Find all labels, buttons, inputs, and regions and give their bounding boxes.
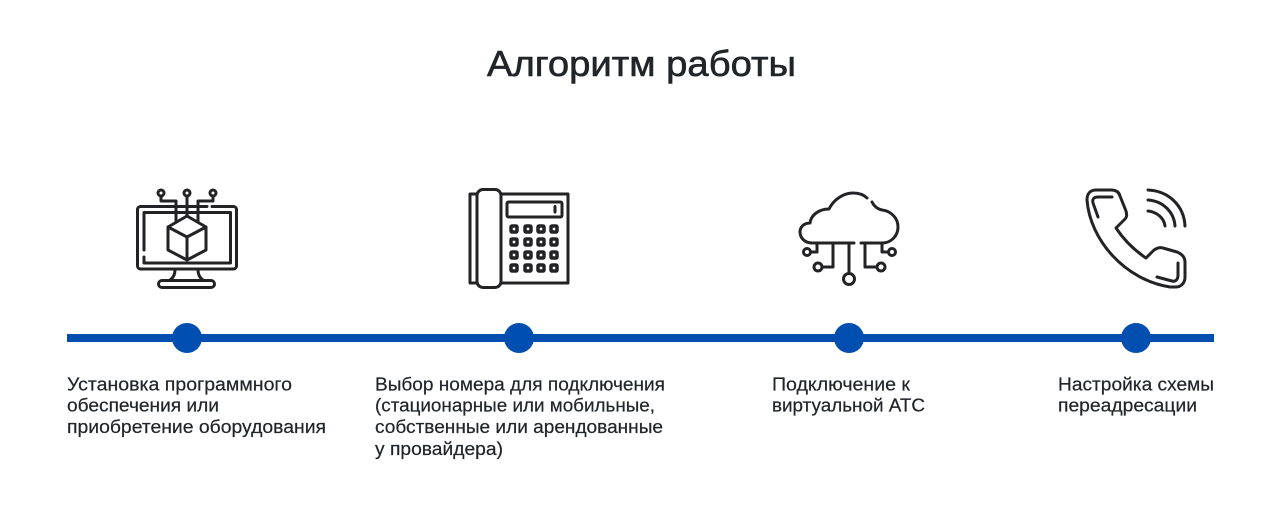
title: Алгоритм работы <box>487 43 796 84</box>
step 2 text: у провайдера) <box>375 438 503 459</box>
step 4 text: переадресации <box>1058 394 1197 416</box>
step 2 text: (стационарные или мобильные, <box>375 394 655 416</box>
timeline marker 4 <box>1121 323 1151 353</box>
step 2 text: собственные или арендованные <box>375 416 663 437</box>
icon: desk telephone <box>470 190 568 288</box>
icon: cloud network <box>800 193 898 284</box>
timeline bar <box>67 334 1214 342</box>
step 3 text <box>772 374 925 416</box>
step 1 text: Установка программного <box>67 374 292 394</box>
timeline marker 3 <box>834 323 864 353</box>
icon: phone handset with signal waves <box>1087 190 1185 287</box>
step 1 text <box>67 374 326 437</box>
timeline marker 1 <box>172 323 202 353</box>
step 2 text <box>375 374 665 459</box>
step 1 text: обеспечения или <box>67 394 219 416</box>
step 2 text: Выбор номера для подключения <box>375 374 665 394</box>
step 4 text: Настройка схемы <box>1058 374 1214 394</box>
timeline marker 2 <box>504 323 534 353</box>
icon: monitor with cube <box>138 190 236 288</box>
step 3 text: виртуальной АТС <box>772 394 925 416</box>
step 1 text: приобретение оборудования <box>67 416 326 437</box>
step 3 text: Подключение к <box>772 374 911 394</box>
step 4 text <box>1058 374 1214 416</box>
